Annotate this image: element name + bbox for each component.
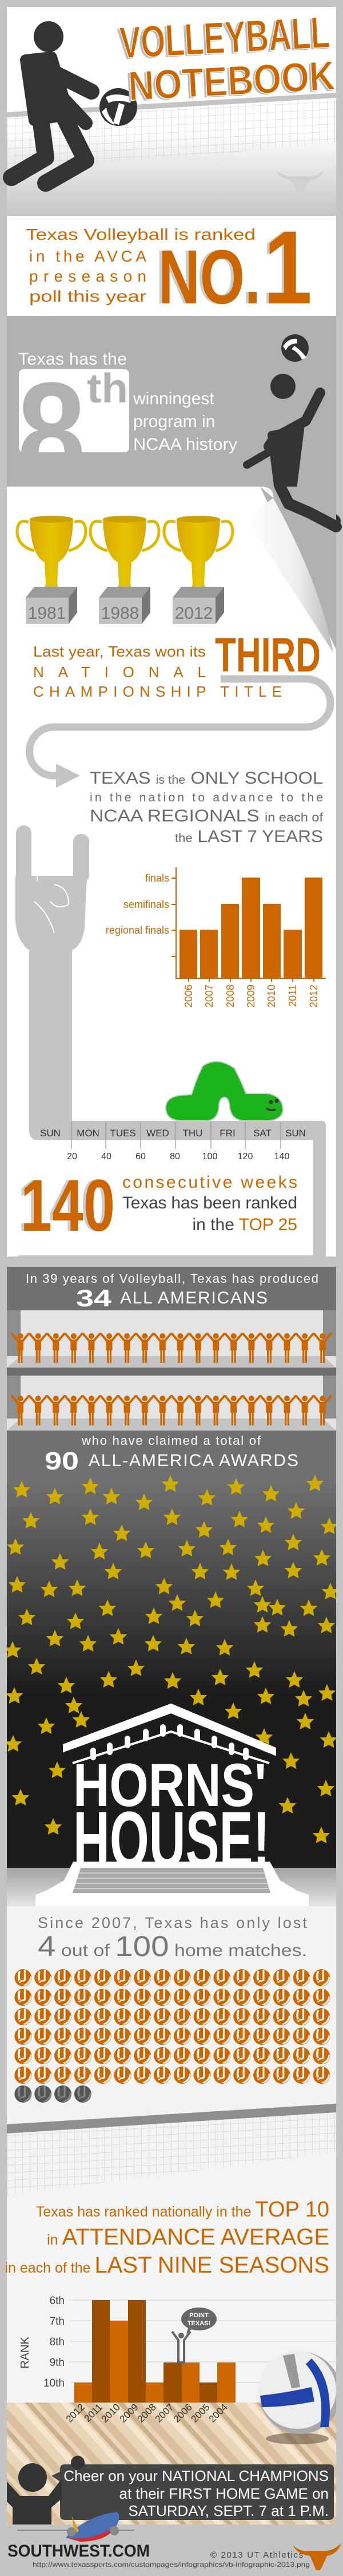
- panel: all americans: 34: [76, 1285, 112, 1311]
- year labels: 2006: [172, 2401, 194, 2425]
- panel: all americans: ALL-AMERICA AWARDS: [89, 1451, 298, 1470]
- big 8th badge: 8: [17, 353, 86, 512]
- title: [116, 6, 336, 111]
- panel: all americans: 90: [45, 1447, 79, 1475]
- bar chart: tournament finish: 2006: [183, 985, 194, 1008]
- day labels: SAT: [253, 1128, 272, 1139]
- bar chart: attendance rank: 10th: [43, 2377, 65, 2389]
- bar chart: attendance rank: RANK: [19, 2337, 31, 2369]
- day labels: 100: [202, 1152, 217, 1161]
- ball grid: losses: [14, 2085, 94, 2103]
- footer: © 2013 UT Athletics: [210, 2550, 303, 2560]
- panel: home record: [7, 1906, 336, 2129]
- bar chart: attendance rank: 6th: [50, 2295, 65, 2307]
- panel: all americans: who have claimed a total of: [81, 1433, 261, 1448]
- year labels: 2009: [118, 2401, 141, 2425]
- bar chart: tournament finish: regional finals: [106, 924, 169, 936]
- icon: longhorn watermark: [276, 171, 324, 193]
- arrow: winding path: [30, 679, 330, 788]
- bar chart: attendance rank: 7th: [50, 2316, 65, 2328]
- callout: cheer on: SATURDAY, SEPT. 7 at 1 P.M.: [128, 2502, 329, 2519]
- panel: all americans: ALL AMERICANS: [120, 1289, 268, 1307]
- panel: 8th winningest: NCAA history: [133, 435, 237, 454]
- icon: ball: [281, 334, 309, 362]
- panel: ranked No.1: Texas Volleyball is ranked: [26, 226, 256, 243]
- day labels: 40: [101, 1152, 111, 1161]
- day labels: 140: [274, 1152, 289, 1161]
- bar chart: attendance rank: 9th: [50, 2357, 65, 2369]
- logo: horns house: [35, 1705, 309, 1906]
- panel: ranked No.1: preseason: [29, 267, 146, 285]
- footer: http://www.texassports.com/custompages/infographics/vb-infographic-2013.png: [33, 2561, 310, 2569]
- panel: all americans: In 39 years of Volleyball, Texas has produced: [26, 1271, 318, 1286]
- panel: attendance: Texas has ranked nationally in the TOP 10: [36, 2198, 329, 2222]
- panel: attendance: in ATTENDANCE AVERAGE: [47, 2225, 329, 2250]
- day labels: 120: [238, 1152, 253, 1161]
- stat: 140 weeks: in the TOP 25: [193, 1215, 297, 1234]
- trophy 2012: [164, 516, 233, 624]
- big number NO.1: 1: [264, 209, 312, 326]
- icon: serving player: [247, 374, 334, 521]
- stat: 140 weeks: 140: [21, 1165, 115, 1247]
- text: only school: TEXAS is the ONLY SCHOOL: [90, 769, 323, 788]
- callout: cheer on: Cheer on your NATIONAL CHAMPIONS: [63, 2467, 329, 2484]
- text: only school: [90, 769, 323, 846]
- bar chart: tournament finish: semifinals: [123, 899, 169, 910]
- icon: fan with POINT TEXAS bubble: POINT: [189, 2312, 209, 2319]
- day labels: 20: [67, 1152, 77, 1161]
- year labels: 2005: [189, 2401, 212, 2425]
- icon: longhorn: [293, 2543, 341, 2570]
- bar chart: tournament finish: 2012: [308, 985, 320, 1008]
- text: third national title: NATIONAL: [33, 663, 206, 681]
- day labels: [40, 1122, 306, 1161]
- bar chart: attendance rank: [19, 2295, 336, 2403]
- year labels: 2008: [135, 2401, 158, 2425]
- shelf 1: [7, 1310, 336, 1368]
- big 8th badge: [19, 369, 129, 452]
- day labels: MON: [77, 1128, 99, 1139]
- big number NO.1: 1: [261, 209, 311, 326]
- panel: ranked No.1: poll this year: [29, 287, 146, 305]
- year labels: 2011: [82, 2401, 105, 2424]
- stat: 140 weeks: Texas has been ranked: [122, 1194, 297, 1212]
- player legs behind curl: [280, 487, 336, 527]
- panel: 8th winningest: [7, 316, 336, 521]
- trophy 2012: 2012: [175, 604, 213, 623]
- footer: SOUTHWEST.COM: [7, 2542, 150, 2561]
- icon: fan with POINT TEXAS bubble: [172, 2308, 217, 2362]
- panel: ranked No.1: in the AVCA: [29, 247, 146, 265]
- ball grid: wins: [14, 1969, 333, 2086]
- trophies: [17, 516, 233, 624]
- text: third national title: [33, 628, 321, 700]
- icon: cheering fan: [7, 2456, 85, 2524]
- bar chart: attendance rank: 8th: [50, 2336, 65, 2348]
- panel: home record: 4 out of 100 home matches.: [38, 1930, 307, 1962]
- year labels: 2004: [207, 2401, 230, 2425]
- bar chart: tournament finish: 2008: [225, 985, 236, 1008]
- page curl: [246, 487, 333, 653]
- icon: fan with POINT TEXAS bubble: TEXAS!: [188, 2320, 210, 2327]
- bar chart: tournament finish: [106, 867, 326, 1008]
- icon: player bumping: [11, 21, 91, 183]
- text: only school: the LAST 7 YEARS: [175, 827, 323, 846]
- panel: home record: Since 2007, Texas has only lost: [38, 1914, 307, 1931]
- year labels: [64, 2401, 230, 2425]
- net top bar: [7, 93, 336, 117]
- panel: attendance: [5, 2104, 336, 2403]
- panel: 8th winningest: winningest: [133, 389, 214, 408]
- panel: championships: [7, 487, 336, 1259]
- year labels: 2012: [64, 2401, 87, 2425]
- year labels: 2007: [153, 2401, 176, 2425]
- day labels: FRI: [220, 1128, 236, 1139]
- bar chart: tournament finish: 2010: [266, 985, 277, 1008]
- big number NO.1: NO.: [155, 235, 258, 320]
- net grid: [7, 98, 336, 172]
- logo: horns house: HORNS': [73, 1751, 266, 1819]
- trophy 1988: [90, 516, 159, 624]
- stat: 140 weeks: consecutive weeks: [122, 1173, 297, 1192]
- big number NO.1: NO.: [158, 235, 261, 320]
- bar chart: tournament finish: 2009: [245, 985, 257, 1008]
- icon: hook em hand and day bar: [15, 825, 326, 1259]
- trophy 1981: 1981: [28, 604, 66, 623]
- icon: volleyball: [99, 88, 137, 126]
- icon: inchworm: [166, 1061, 283, 1121]
- stat: 140 weeks: [18, 1165, 297, 1247]
- panel: attendance: in each of the LAST NINE SEASONS: [5, 2253, 329, 2278]
- text: only school: in the nation to advance to the: [90, 791, 323, 804]
- day labels: THU: [183, 1128, 202, 1139]
- trophy 1988: 1988: [101, 604, 139, 623]
- callout: cheer on: [51, 2464, 334, 2520]
- footer: [0, 2512, 343, 2576]
- day labels: SUN: [285, 1128, 306, 1139]
- shelf 2: [7, 1376, 336, 1431]
- day labels: 60: [135, 1152, 146, 1161]
- panel: header: [7, 6, 336, 215]
- icon: big volleyball: [258, 2351, 341, 2444]
- text: third national title: CHAMPIONSHIP TITLE: [33, 683, 282, 700]
- day labels: SUN: [40, 1128, 61, 1139]
- panel: all americans: [7, 1255, 336, 1479]
- stat: 140 weeks: 140: [18, 1165, 112, 1247]
- day labels: 80: [170, 1152, 180, 1161]
- panel: ranked No.1: [7, 209, 336, 326]
- floor: [7, 1868, 336, 1908]
- big number NO.1: [155, 209, 312, 326]
- day labels: TUES: [110, 1128, 136, 1139]
- bar chart: tournament finish: 2011: [287, 985, 298, 1007]
- big 8th badge: th: [87, 366, 128, 412]
- day labels: WED: [146, 1128, 169, 1139]
- bar chart: tournament finish: finals: [145, 872, 169, 884]
- trophy 1981: [17, 516, 86, 624]
- bar chart: tournament finish: 2007: [204, 985, 215, 1008]
- panel: stars and horns house: [4, 1475, 339, 1908]
- panel: 8th winningest: Texas has the: [18, 350, 127, 369]
- icon: airplane: [17, 2512, 134, 2542]
- panel: wood floor: [7, 2351, 341, 2524]
- panel: 8th winningest: program in: [133, 412, 215, 431]
- text: only school: NCAA REGIONALS in each of: [90, 807, 323, 825]
- text: third national title: Last year, Texas won its: [33, 643, 206, 660]
- year labels: 2010: [99, 2401, 122, 2425]
- callout: cheer on: at their FIRST HOME GAME on: [119, 2485, 329, 2502]
